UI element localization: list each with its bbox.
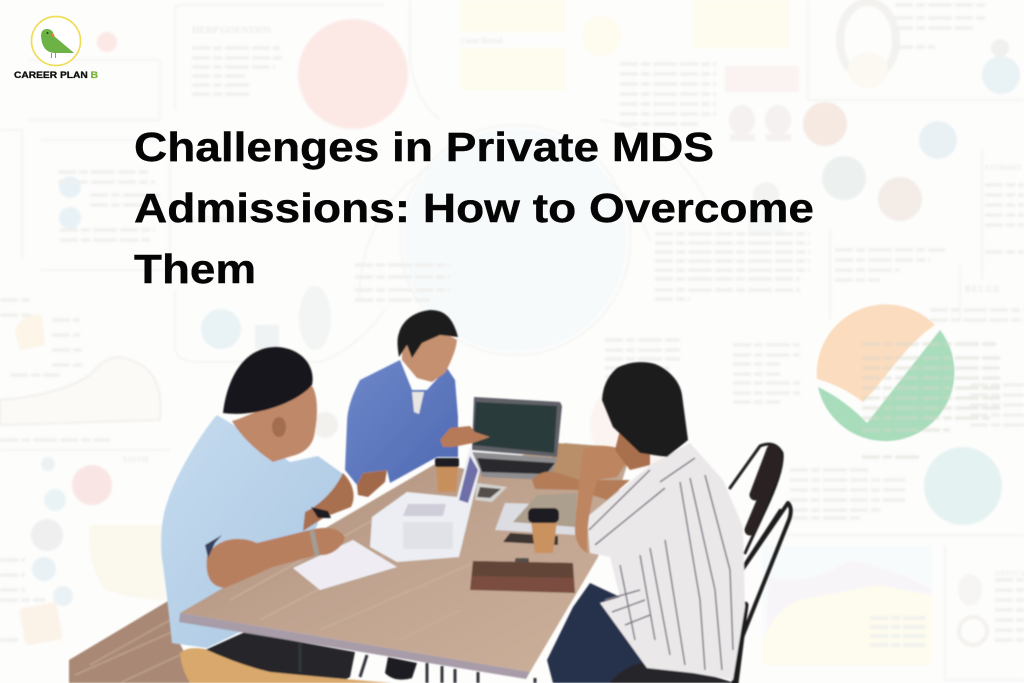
faint backdrop headings: EXTREDOLLET bbox=[192, 215, 254, 224]
laptop screen bbox=[473, 402, 557, 453]
backdrop lower right landscape bbox=[762, 545, 987, 665]
person middle: blue shirt bbox=[345, 360, 458, 485]
leather wallet bbox=[470, 558, 575, 593]
person left: light blue shirt bbox=[161, 415, 343, 648]
person left: dark trousers bbox=[205, 632, 355, 683]
person middle: hair bbox=[398, 310, 458, 358]
person left: writing arm bbox=[207, 528, 345, 588]
table top bbox=[180, 443, 628, 672]
white laptop bbox=[370, 447, 480, 562]
person right: chin hand and forearm bbox=[575, 446, 632, 553]
title line 2: Admissions: How to Overcome bbox=[134, 185, 814, 231]
person left: notebook bbox=[293, 540, 397, 590]
icon: backdrop check mark circle bbox=[817, 304, 954, 441]
black chair bbox=[673, 444, 791, 683]
faint backdrop headings: Cium liuvod bbox=[460, 36, 503, 45]
silver laptop bbox=[513, 493, 577, 527]
backdrop portraits top right bbox=[725, 2, 1020, 233]
faint backdrop headings: TASTH bbox=[122, 455, 149, 464]
person left: right forearm bbox=[303, 473, 354, 531]
centre laptop bbox=[472, 397, 562, 480]
logo ring bbox=[32, 16, 80, 66]
papers and clipboard bbox=[495, 503, 575, 535]
table legs bbox=[300, 643, 535, 683]
bench grain bbox=[75, 620, 180, 683]
backdrop left cluster bbox=[0, 176, 338, 646]
faint backdrop headings: HERP GOENTIOS bbox=[192, 26, 271, 36]
person middle: white undershirt bbox=[412, 392, 424, 414]
logo wordmark: CAREER PLAN B bbox=[14, 70, 98, 81]
bench floor at lower left bbox=[69, 601, 200, 683]
faint backdrop headings bbox=[122, 26, 1024, 578]
person left: sleeve shadow bbox=[205, 535, 222, 558]
white laptop keyboard bbox=[403, 522, 453, 549]
coffee cup left bbox=[435, 458, 459, 492]
person left: black beanie bbox=[223, 347, 313, 414]
backdrop circle: large centre bbox=[403, 128, 627, 352]
person left: neck and face bbox=[232, 386, 317, 462]
white laptop screen bbox=[459, 456, 478, 503]
person middle: lower hand bbox=[357, 470, 387, 497]
person right: hair bbox=[602, 362, 688, 457]
laptop lid bbox=[472, 397, 562, 457]
table back lighter area bbox=[548, 443, 628, 480]
title line 3: Them bbox=[134, 246, 256, 292]
wooden chair back bbox=[180, 648, 392, 683]
white laptop document bbox=[403, 504, 446, 516]
logo bbox=[14, 16, 98, 81]
shoe bbox=[385, 657, 417, 680]
person right: striped shirt bbox=[587, 443, 745, 680]
logo bird bbox=[41, 29, 74, 58]
check circle green part bbox=[818, 330, 954, 441]
backdrop yellow note boxes bbox=[460, 0, 790, 90]
person right: trousers bbox=[547, 583, 657, 683]
backdrop circle: rose left bbox=[72, 465, 112, 505]
shirt stripes bbox=[589, 458, 733, 670]
person left: bracelet bbox=[309, 530, 320, 556]
tablet dark screen bbox=[477, 487, 501, 498]
photo: team meeting around a table bbox=[69, 310, 791, 683]
person right: neck bbox=[615, 430, 650, 470]
phone on table bbox=[503, 533, 558, 545]
coffee cup right bbox=[528, 508, 559, 553]
black chair seat bbox=[610, 660, 735, 683]
check circle orange part bbox=[817, 304, 935, 402]
tablet on table bbox=[475, 483, 507, 502]
laptop keyboard bbox=[477, 458, 555, 474]
person left: ear bbox=[272, 417, 286, 437]
title line 1: Challenges in Private MDS bbox=[134, 124, 714, 170]
table grain bbox=[230, 505, 480, 640]
person left: watch bbox=[311, 507, 331, 518]
person middle: face bbox=[402, 330, 457, 382]
backdrop circle: teal right bbox=[924, 447, 1002, 525]
title bbox=[134, 124, 814, 292]
table front edge bbox=[179, 613, 530, 679]
backdrop circle: pale rose middle bbox=[590, 380, 680, 470]
faint backdrop headings: EXTREDIT bbox=[985, 164, 1022, 172]
faint text over check circle bbox=[862, 344, 1000, 457]
faint backdrop headings: BELGE bbox=[965, 284, 1001, 294]
laptop base bbox=[472, 452, 557, 480]
backdrop circle: small pink bbox=[97, 32, 117, 52]
backdrop circle: red bbox=[298, 19, 408, 129]
person middle: pointing hand bbox=[440, 426, 490, 447]
person right: arm on table bbox=[532, 472, 630, 500]
